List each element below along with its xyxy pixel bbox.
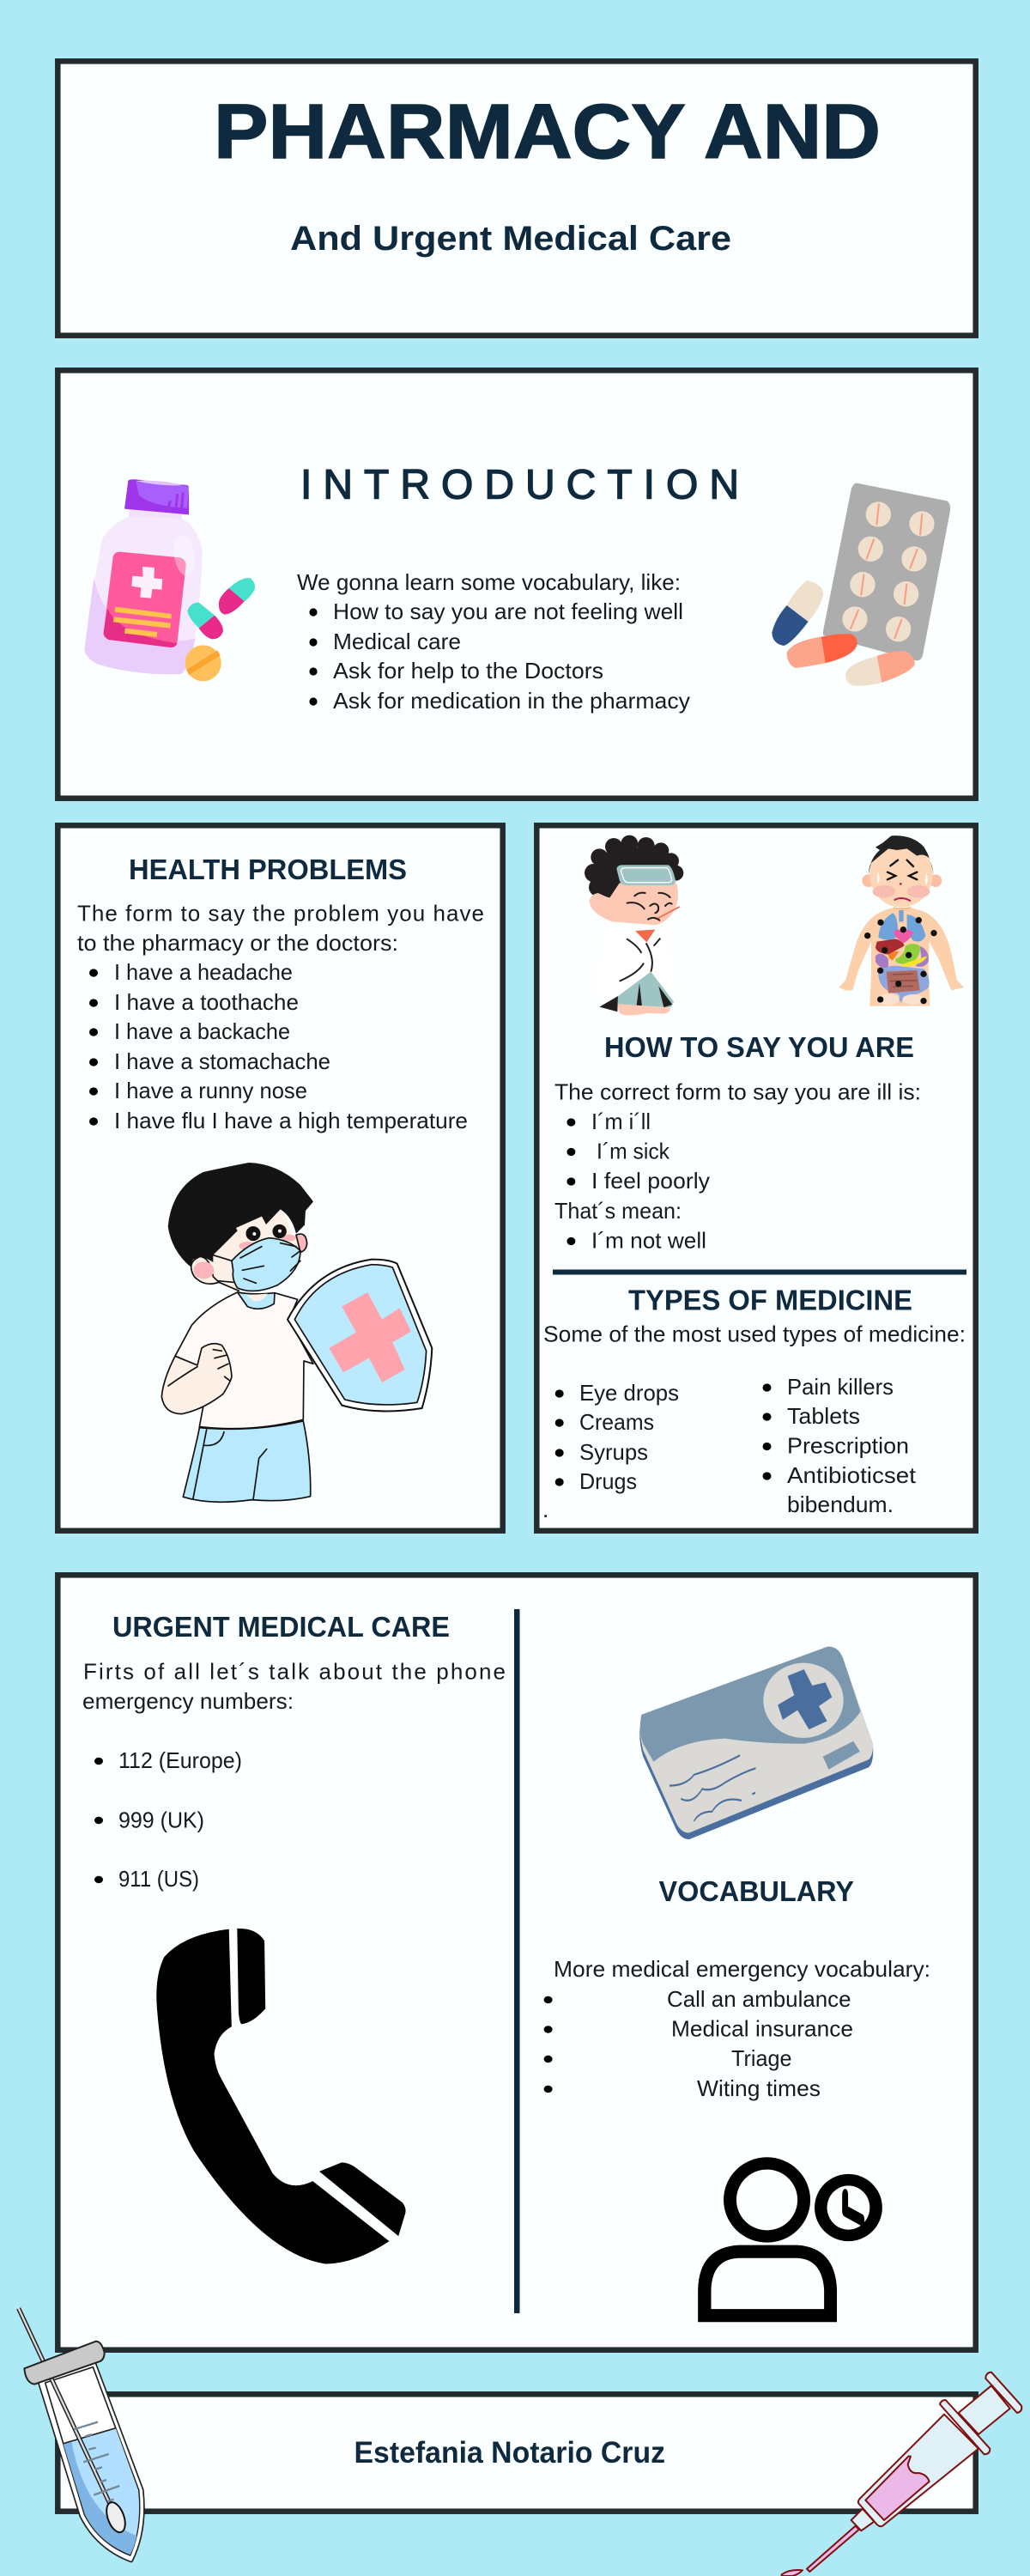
- text block: types of medicine lists: bibendum.: [787, 1492, 894, 1517]
- text block: how to say list: The correct form to say you are ill is:: [554, 1078, 921, 1104]
- panel: author: [58, 2394, 976, 2512]
- text block: health problems list: The form to say the problem you have: [77, 900, 484, 926]
- heading: urgent medical care: URGENT MEDICAL CARE: [112, 1611, 450, 1643]
- heading: how to say you are: HOW TO SAY YOU ARE: [604, 1031, 914, 1063]
- text block: how to say list: I´m sick: [597, 1139, 670, 1164]
- icon: sick child with visible organs: [839, 835, 964, 1006]
- text block: types of medicine lists: Prescription: [787, 1432, 909, 1458]
- heading: introduction: INTRODUCTION: [300, 462, 739, 508]
- icon: boy with mask and shield: [161, 1163, 432, 1502]
- text block: emergency numbers: Firts of all let´s talk about the phone: [83, 1659, 506, 1685]
- text block: vocabulary list: [544, 1956, 930, 2101]
- icon: person with clock: [698, 2157, 882, 2322]
- text block: types of medicine lists: Eye drops: [579, 1380, 679, 1406]
- text block: types of medicine lists: Tablets: [787, 1403, 860, 1429]
- title: PHARMACY AND: [214, 89, 881, 175]
- panel: title: [58, 61, 976, 336]
- icon: medicine bottle with pills: [84, 479, 255, 681]
- text block: emergency numbers: 999 (UK): [118, 1807, 204, 1832]
- text block: how to say list: I´m i´ll: [591, 1109, 651, 1134]
- text block: health problems list: I have a headache: [114, 959, 293, 985]
- text block: emergency numbers: 112 (Europe): [118, 1747, 242, 1773]
- icon: telephone handset: [156, 1929, 406, 2263]
- panel: health problems: [58, 825, 503, 1531]
- text block: how to say list: That´s mean:: [554, 1198, 682, 1224]
- text block: health problems list: I have a toothache: [114, 989, 299, 1015]
- text block: how to say list: I feel poorly: [591, 1168, 710, 1194]
- heading: vocabulary: VOCABULARY: [659, 1875, 854, 1907]
- text block: vocabulary list: Triage: [731, 2045, 791, 2071]
- panel: how to say you are / types of medicine: [536, 825, 976, 1531]
- text block: vocabulary list: More medical emergency vocabulary:: [554, 1956, 930, 1982]
- text block: types of medicine lists: Syrups: [579, 1439, 648, 1465]
- text block: how to say list: [554, 1078, 921, 1254]
- text block: types of medicine lists: Antibioticset: [787, 1462, 917, 1488]
- text block: vocabulary list: Witing times: [697, 2075, 821, 2101]
- text block: health problems list: I have flu I have a high temperature: [114, 1108, 468, 1133]
- panel: urgent medical care and vocabulary: [58, 1575, 976, 2350]
- icon: sick doctor with thermometer: [585, 835, 695, 1016]
- icon: syringe: [782, 2372, 1021, 2576]
- icon: test tube with swab: [19, 2308, 142, 2561]
- text block: types of medicine lists: .: [542, 1497, 548, 1522]
- subtitle: And Urgent Medical Care: [290, 220, 731, 258]
- text block: introduction list: Ask for help to the Doctors: [333, 658, 603, 683]
- text block: introduction list: Medical care: [333, 629, 461, 654]
- text block: health problems list: to the pharmacy or the doctors:: [77, 930, 398, 956]
- text block: introduction list: Ask for medication in the pharmacy: [333, 688, 690, 714]
- text block: types of medicine lists: Some of the most used types of medicine:: [543, 1321, 966, 1346]
- text block: health problems list: I have a backache: [114, 1018, 290, 1044]
- text block: introduction list: [297, 569, 690, 714]
- heading: types of medicine: TYPES OF MEDICINE: [628, 1285, 912, 1315]
- heading: health problems: HEALTH PROBLEMS: [129, 854, 407, 885]
- author name: Estefania Notario Cruz: [354, 2436, 665, 2470]
- text block: how to say list: I´m not well: [591, 1228, 706, 1254]
- text block: introduction list: How to say you are not feeling well: [333, 598, 683, 624]
- text block: health problems list: I have a runny nose: [114, 1078, 307, 1103]
- text block: introduction list: We gonna learn some vocabulary, like:: [297, 569, 681, 595]
- text block: health problems list: I have a stomachache: [114, 1048, 330, 1074]
- text block: types of medicine lists: Drugs: [579, 1468, 637, 1494]
- text block: health problems list: [77, 900, 484, 1133]
- text block: emergency numbers: emergency numbers:: [82, 1688, 294, 1714]
- text block: vocabulary list: Call an ambulance: [667, 1986, 851, 2012]
- text block: types of medicine lists: Creams: [579, 1409, 654, 1435]
- icon: insurance card: [639, 1647, 873, 1839]
- text block: emergency numbers: [82, 1659, 506, 1892]
- text block: vocabulary list: Medical insurance: [671, 2016, 853, 2042]
- panel: introduction: [58, 370, 976, 799]
- icon: blister pack and capsules: [772, 483, 950, 686]
- text block: types of medicine lists: Pain killers: [787, 1374, 894, 1400]
- text block: emergency numbers: 911 (US): [118, 1866, 199, 1892]
- text block: types of medicine lists: [542, 1321, 966, 1522]
